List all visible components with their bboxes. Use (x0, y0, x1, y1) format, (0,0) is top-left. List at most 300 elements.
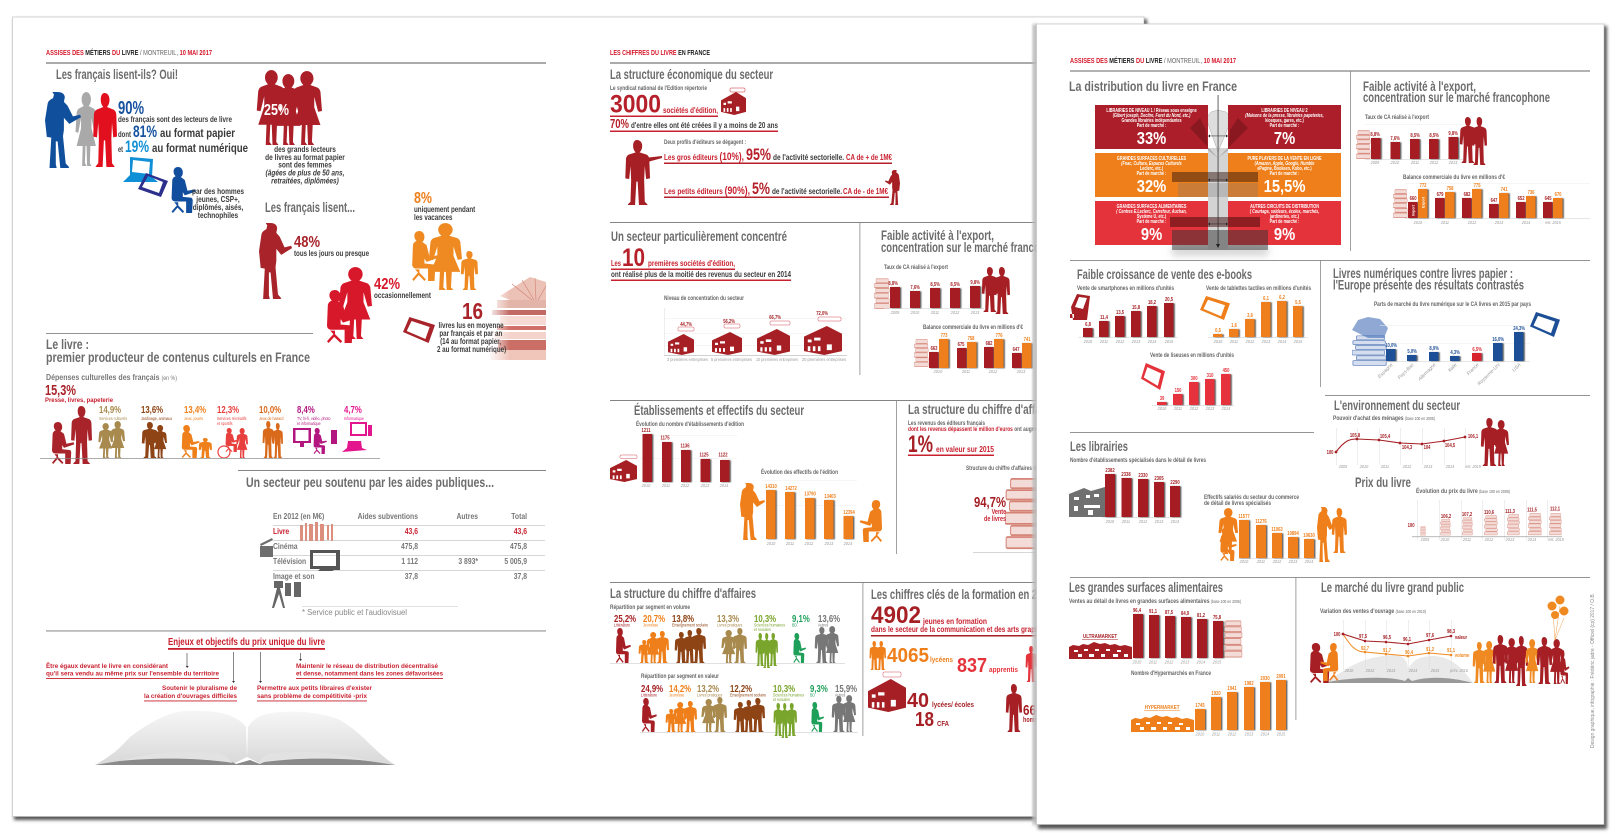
stat: 16 books per year: livres lus en moyenne (439, 321, 504, 330)
chart: market share by country: 10,0% (1385, 343, 1398, 348)
stat: 90 percent readers: et (118, 145, 123, 154)
chart: export share: 2010 (910, 310, 920, 315)
chart: établissements: 1175 (661, 435, 670, 441)
icon: crowd (1473, 635, 1569, 686)
chart: trade balance: est. 2015 (1545, 220, 1561, 225)
chart: export share: 2011 (1410, 160, 1420, 165)
chart: bookshop employees: 10630 (1303, 533, 1315, 538)
objective 2: la création d'ouvrages difficiles (144, 693, 237, 700)
chart: segments in volume: Livres pratiques (717, 622, 742, 628)
heading: L'environnement du secteur (1334, 397, 1460, 413)
stat: services récréatifs et sportifs: et sportifs (217, 421, 233, 426)
box: grandes surfaces alimentaires: 9% (1141, 225, 1163, 244)
chart: smartphones: 2015 (1164, 339, 1174, 344)
panel: un secteur peu soutenu (238, 470, 546, 617)
panel: faible activité à l'export, front page (1356, 78, 1590, 225)
panel: prix du livre (1355, 474, 1564, 542)
panel: e-books: Vente de smartphones en millions d'unités (1077, 285, 1174, 292)
chart: bookshop employees: 11063 (1271, 527, 1283, 532)
objective 1: Être égaux devant le livre en considérant (46, 661, 169, 670)
chart: smartphones (1070, 294, 1178, 344)
chart: book sales variation: 2010 (1344, 668, 1354, 673)
chart: effectifs: 2012 (804, 541, 814, 546)
credits: Design graphique, infographie : Frédéric jadre - Officiel (cp) 2017 / O.B. (1590, 593, 1596, 748)
icon and stat: 25 percent women (257, 70, 345, 186)
stat: 70 percent: d'entre elles ont été créées il y a moins de 20 ans (631, 121, 778, 130)
stat: gros éditeurs: Les gros éditeurs (10%), (664, 151, 744, 163)
chart: book sales variation: 92,7 (1361, 646, 1369, 651)
chart: hypermarkets: 1982 (1244, 681, 1254, 686)
stat: gros éditeurs: de l'activité sectorielle. (773, 153, 844, 162)
chart: tablets: 6,1 (1263, 296, 1269, 301)
panel: grandes surfaces alimentaires: Nombre d'Hypermarchés en France (1131, 670, 1211, 677)
header line right page: ASSISES DES MÉTIERS DU LIVRE / MONTREUIL, 10 MAI 2017 (1070, 56, 1236, 65)
chart: trade balance: 773 (941, 333, 948, 338)
chart: book sales variation: volume (1455, 653, 1470, 658)
heading: La structure du chiffre d'affaires (908, 401, 1058, 417)
chart: number of bookshops: 2290 (1170, 480, 1180, 485)
heading: Les chiffres clés de la formation en 2015 (871, 586, 1053, 602)
arrow: vertical axis (1208, 95, 1228, 248)
chart: hypermarkets: HYPERMARKET (1145, 705, 1180, 711)
chart: e-readers (1141, 363, 1234, 411)
chart: purchasing power line: 2011 (1380, 464, 1390, 469)
chart: bookshop employees: 2011 (1256, 559, 1266, 564)
chart: purchasing power line: 100 (1327, 450, 1334, 455)
chart: segments in value: et sociales (773, 697, 790, 702)
panel: établissements et effectifs: Évolution des effectifs de l'édition (761, 467, 838, 476)
chart: export share: 8,5% (1429, 133, 1440, 138)
chart: e-readers: 150 (1175, 388, 1182, 393)
chart: trade balance: 652 (1518, 196, 1525, 201)
chart: export share: 2009 (1370, 160, 1380, 165)
chart: segments in value: 14,2% (669, 683, 691, 694)
stat: 16 books per year: par français et par an (439, 329, 502, 338)
table: aides en 2012: Total (511, 511, 527, 521)
stat: 10 premières sociétés: ont réalisé plus de la moitié des revenus du secteur en 2014 (611, 270, 791, 279)
chart: segments in value: Enseignement scolaire (730, 692, 767, 698)
panel: un secteur particulièrement concentré: Niveau de concentration du secteur (664, 295, 744, 302)
box: librairies niveau 1: Part de marché : (1137, 122, 1167, 129)
chart: hypermarkets: 2010 (1195, 731, 1205, 737)
chart: smartphones: 20,5 (1165, 297, 1173, 302)
stat: 10 premières sociétés: Les (611, 258, 621, 268)
chart: book price: 2011 (1462, 537, 1472, 542)
panel: back spread sheet (12, 17, 1147, 820)
table: aides en 2012: Autres (457, 511, 478, 521)
chart: retail sales: 81,2 (1197, 613, 1205, 618)
stat: jardinage animaux (141, 404, 173, 458)
chart: trade balance: 647 (1491, 198, 1498, 203)
chart: smartphones: 2013 (1131, 339, 1141, 344)
box: librairies niveau 1 (1095, 105, 1208, 149)
chart: segments in volume (610, 613, 845, 668)
stat: 42 percent (327, 267, 431, 346)
chart: retail sales: 2010 (1132, 659, 1142, 665)
chart: bookshop employees: 2010 (1239, 559, 1249, 564)
chart: e-readers: 39 (1160, 396, 1165, 401)
stat: 3000 sociétés: 3000 (610, 90, 661, 118)
chart: smartphones: 11,4 (1100, 315, 1108, 320)
stat: informatique (342, 404, 372, 452)
chart: concentration buildings: 72,0% (816, 311, 829, 316)
box: grandes surfaces culturelles (1095, 153, 1208, 197)
stat: jeux jouets: 13,4% (184, 404, 206, 415)
chart: export share: 9,8% (970, 280, 981, 285)
chart: e-readers: 2012 (1189, 406, 1199, 411)
chart: tablets: 6,2 (1279, 295, 1285, 300)
box: autres circuits: ( Courtage, soldeurs, écoles, marchés, (1250, 208, 1319, 215)
panel: structure du chiffre d'affaires, 1 percent: dont les revenus dépassent le million d'euros ont augmenté de (908, 427, 1054, 433)
chart: market share by country: Allemagne (1416, 362, 1438, 383)
chart: number of bookshops: 2305 (1154, 476, 1164, 481)
icon: reading man small (885, 167, 900, 205)
chart: trade balance: 736 (1528, 190, 1535, 195)
chart: book price: 2012 (1484, 537, 1494, 542)
chart: segments in volume: BD (792, 622, 797, 628)
icon: three readers (45, 85, 117, 168)
chart: effectifs: 12394 (843, 510, 855, 515)
chart: bookshop employees: 11577 (1238, 514, 1250, 519)
heading: Prix du livre (1355, 474, 1411, 490)
panel: grandes surfaces alimentaires (1069, 577, 1590, 737)
box: grandes surfaces culturelles: GRANDES SURFACES CULTURELLES (1117, 155, 1186, 162)
chart: export share: 2009 (890, 310, 900, 315)
chart: trade balance: 2013 (1016, 369, 1026, 374)
stat: 40 lycées, 18 CFA: 40 (907, 690, 929, 712)
stat: jeux jouets: Jeux, jouets (184, 416, 203, 421)
panel: la structure économique du secteur: Le syndicat national de l'Edition répertorie (610, 85, 707, 92)
stat: 4902 jeunes: jeunes en formation (922, 617, 987, 626)
chart: tablets: 2011 (1229, 339, 1239, 344)
chart: établissements: 2014 (719, 483, 729, 488)
stat: 90 percent readers (118, 98, 248, 156)
heading: La distribution du livre en France (1069, 78, 1237, 94)
stat: 4065 lycéens: lycéens (930, 657, 953, 664)
chart: books pile 94,7 percent: de livres (984, 515, 1007, 523)
stat: 70 percent: 70% (610, 116, 629, 131)
overlay: book silhouettes (1170, 118, 1268, 250)
chart: export share (1356, 124, 1465, 165)
chart: segments in value: Littérature (641, 692, 658, 698)
box: pure players: ePagine, Bookeen, Kobo, etc.) (1257, 165, 1312, 172)
objective 3: Permettre aux petits libraires d'exister (257, 685, 372, 692)
box: librairies niveau 2: LIBRAIRIES DE NIVEAU 2 (1261, 107, 1308, 114)
chart: établissements: 1136 (681, 443, 690, 449)
chart: smartphones: 2010 (1083, 339, 1093, 344)
chart: purchasing power line: 2010 (1359, 464, 1369, 469)
chart: retail sales: 2012 (1164, 659, 1174, 665)
chart: purchasing power line: 105,4 (1380, 434, 1391, 439)
chart: établissements: 1211 (642, 428, 651, 433)
stat: 4902 jeunes (871, 602, 1056, 636)
panel: structure du chiffre d'affaires par segment (610, 582, 1037, 738)
chart: export share: 9,8% (1448, 131, 1459, 136)
chart: établissements: 1125 (700, 452, 709, 458)
chart: segments in value: 9,3% (810, 683, 828, 694)
chart: concentration buildings (664, 308, 847, 362)
icon: handshake (982, 267, 1010, 314)
chart: retail sales: 2013 (1180, 659, 1190, 665)
table: aides en 2012: 43,6 (514, 526, 527, 536)
chart: effectifs: 14272 (785, 486, 797, 491)
chart: purchasing power line (1327, 428, 1481, 469)
icon and stat: 25 percent women: (âgées de plus de 50 ans, (266, 168, 344, 178)
panel: faible activité à l'export, back page (874, 227, 1068, 374)
objective 3: sans problème de compétitivité -prix (257, 693, 367, 700)
icon and stat: 25 percent women: de livres au format papier (265, 152, 345, 162)
chart: segments in volume: Autres (818, 622, 828, 628)
objective 4: Maintenir le réseau de distribution décentralisé (296, 663, 438, 670)
chart: trade balance: Import (1412, 204, 1416, 216)
chart: retail sales: ULTRAMARKET (1083, 634, 1118, 640)
chart: segments in value: 12,2% (730, 683, 752, 694)
chart: effectifs: 2013 (824, 541, 834, 546)
stat: tv hi-fi vidéo photo: TV, hi-fi, vidéo, photo (297, 416, 331, 421)
chart: retail sales: 2014 (1196, 659, 1206, 665)
panel: la structure économique du secteur: Deux profils d'éditeurs se dégagent : (664, 139, 746, 146)
chart: trade balance (914, 333, 1048, 374)
chart: export share: 2013 (970, 310, 980, 315)
chart: market share by country: 5,0% (1407, 349, 1418, 354)
chart: book sales variation: 96,5 (1383, 635, 1391, 640)
icon: laptop, tablet and seated man: technophiles (198, 210, 238, 220)
icon: handshake (1460, 117, 1487, 165)
chart: book sales variation: 2015 (1430, 668, 1440, 673)
subtitle: dépenses culturelles: Dépenses culturelles des français (en %) (46, 373, 177, 382)
heading: enjeux: Enjeux et objectifs du prix unique du livre (168, 637, 325, 648)
panel: structure du chiffre d'affaires, 1 percent: Structure du chiffre d'affaires des éditeurs (966, 465, 1061, 472)
chart: retail sales: 2011 (1148, 659, 1158, 665)
stat: 4065 lycéens: 4065 (887, 645, 929, 667)
box: autres circuits: AUTRES CIRCUITS DE DISTRIBUTION (1250, 203, 1319, 210)
stat: 66 percent hommes: hommes (1023, 716, 1046, 724)
table: aides en 2012: 3 893* (458, 556, 478, 566)
panel: front sheet (1032, 24, 1607, 829)
icon: family (1481, 418, 1509, 466)
chart: books pile 94,7 percent: 94,7% (974, 494, 1006, 511)
heading: Un secteur particulièrement concentré (611, 228, 787, 244)
chart: hypermarkets: 1920 (1211, 691, 1221, 696)
box: grandes surfaces alimentaires: Part de marché : (1137, 218, 1167, 225)
chart: segments in value: BD (810, 692, 815, 698)
chart: bookshop employees: 10894 (1287, 531, 1299, 536)
chart: trade balance: 2010 (1413, 220, 1423, 225)
chart: tablets: 2014 (1277, 339, 1287, 344)
box: grandes surfaces culturelles: Part de marché : (1137, 170, 1167, 177)
chart: book price: 2010 (1440, 537, 1450, 542)
chart: export share: 2012 (950, 310, 960, 315)
box: autres circuits: Part de marché : (1270, 218, 1300, 225)
chart: book price: 107,2 (1462, 512, 1473, 517)
stat: tv hi-fi vidéo photo (293, 404, 337, 455)
chart: export share: 2012 (1429, 160, 1439, 165)
chart: purchasing power line: 104,5 (1445, 443, 1456, 448)
objective 4 (296, 663, 443, 679)
heading: La structure économique du secteur (610, 66, 773, 82)
chart: hypermarkets: 2014 (1260, 731, 1270, 737)
chart: concentration buildings: 5 premières entreprises (711, 357, 753, 362)
heading: Le marché du livre grand public (1321, 579, 1464, 595)
heading: La structure du chiffre d'affaires (610, 585, 756, 601)
panel: faible activité à l'export, front page: Balance commerciale du livre en millions d'€ (1403, 174, 1505, 181)
box: pure players: (Amazon, Apple, Google, Humble (1255, 160, 1315, 167)
stat: presse livres papeterie: 15,3% (45, 382, 76, 399)
chart: hypermarkets: 2012 (1227, 731, 1237, 737)
stat: petits éditeurs: Les petits éditeurs (90%), (664, 185, 750, 197)
icon: camera tripod (272, 581, 301, 608)
chart: segments in volume: 13,3% (717, 613, 739, 624)
chart: export share: 2010 (1390, 160, 1400, 165)
chart: book price (1408, 500, 1564, 542)
chart: market share by country: Pays-Bas (1397, 362, 1416, 381)
panel: e-books: Vente de liseuses en millions d'unités (1150, 352, 1234, 359)
chart: market share by country: 8,0% (1429, 346, 1440, 351)
chart: market share by country: 16,0% (1492, 337, 1505, 342)
chart: smartphones: 15,8 (1132, 305, 1140, 310)
chart: trade balance: 647 (1013, 347, 1020, 352)
panel: environnement du secteur: Pouvoir d'achat des ménages (base 100 en 2005) (1333, 415, 1435, 422)
panel: faible activité à l'export, back page: Taux de CA réalisé à l'export (884, 264, 949, 271)
table: aides en 2012: Cinéma (273, 541, 298, 551)
panel: faible activité à l'export, front page: Taux de CA réalisé à l'export (1365, 114, 1430, 121)
stat: 8 percent: 8% (414, 190, 432, 207)
chart: hypermarkets: 1745 (1195, 703, 1205, 708)
icon and stat: 25 percent women: 25% (264, 102, 289, 119)
chart: number of bookshops: 2338 (1121, 472, 1131, 477)
chart: book sales variation: 91,7 (1383, 648, 1391, 653)
stat: services culturels: Services culturels (99, 416, 127, 421)
chart: book sales variation: 91,1 (1447, 648, 1455, 653)
heading: les français lisent: Les français lisent... (265, 199, 355, 215)
chart: segments in volume: Sciences humaines (754, 622, 785, 628)
chart: book sales variation: 2014 (1408, 668, 1418, 673)
chart: book price: 111,5 (1527, 507, 1537, 513)
chart: book sales variation: 91,2 (1426, 647, 1434, 652)
box: autres circuits: 9% (1274, 225, 1296, 244)
icon: seated pair (1310, 643, 1338, 685)
stat: 10 premières sociétés (611, 244, 791, 281)
icon and stat: 25 percent women: des grands lecteurs (274, 144, 336, 154)
chart: purchasing power line: est. 2015 (1465, 464, 1481, 469)
icon: laptop, tablet and seated man (123, 157, 244, 220)
chart: books pile 94,7 percent: Vente (992, 508, 1007, 516)
box: pure players: Part de marché : (1270, 170, 1300, 177)
chart: export share: 7,6% (910, 285, 921, 290)
stat: 16 books per year: 2 au format numérique) (437, 345, 507, 354)
objective 4: et dense, notamment dans les zones défavorisées (296, 670, 443, 678)
chart: établissements (610, 428, 737, 488)
chart: segments in value: Sciences humaines (773, 692, 804, 698)
panel: les librairies: de détail de livres spécialisés (1204, 500, 1271, 507)
chart: purchasing power line: 104,3 (1402, 445, 1413, 450)
chart: trade balance: 660 (1410, 196, 1417, 201)
stat: 1 percent (908, 431, 994, 458)
stat: services culturels: 14,9% (99, 404, 121, 415)
panel: marché du livre grand public (1310, 579, 1569, 686)
chart: book sales variation: 97,6 (1426, 633, 1434, 638)
chart: retail sales: 91,1 (1149, 609, 1157, 614)
chart: books pile 94,7 percent (973, 479, 1048, 553)
chart: concentration buildings: 3 premières entreprises (667, 357, 709, 362)
chart: concentration buildings: 10 premières entreprises (756, 357, 799, 362)
stat: 90 percent readers: dont (118, 130, 131, 139)
icon: laptop, tablet and seated man: jeunes, CSP+, (195, 194, 240, 204)
chart: number of bookshops: 2010 (1105, 519, 1115, 524)
box: grandes surfaces culturelles: 32% (1137, 177, 1167, 196)
chart: number of bookshops: 2382 (1105, 468, 1115, 473)
table: aides en 2012: Image et son (273, 571, 315, 581)
stat: 4065 lycéens (870, 641, 953, 670)
chart: export share (874, 279, 984, 315)
stat: tv hi-fi vidéo photo: 8,4% (297, 404, 315, 415)
chart: hypermarkets: 2011 (1211, 731, 1221, 737)
panel: les librairies: Effectifs salariés du secteur du commerce (1204, 494, 1299, 501)
panel: le livre, dépenses culturelles (40, 333, 380, 466)
chart: effectifs (740, 478, 882, 546)
chart: purchasing power line: 105,8 (1350, 433, 1361, 438)
icon: faded book pile (490, 277, 546, 362)
chart: segments in value: 10,3% (773, 683, 795, 694)
icon: book stack background (1172, 110, 1268, 255)
chart: export share: 2011 (930, 310, 940, 315)
stat: 1 percent: 1% (908, 431, 933, 458)
chart: book price: 111,3 (1505, 509, 1515, 514)
chart: trade balance: 776 (996, 333, 1003, 338)
heading: Faible activité à l'export, (1363, 78, 1476, 94)
heading: Les grandes surfaces alimentaires (1069, 579, 1223, 595)
stat: 8 percent (412, 190, 478, 290)
heading: le livre premier producteur: Le livre : (46, 336, 89, 352)
chart: book price: est. 2015 (1548, 537, 1564, 542)
stat: 40 lycées, 18 CFA: CFA (937, 719, 949, 728)
chart: e-readers: 2014 (1221, 406, 1231, 411)
box: librairies niveau 2: 7% (1274, 129, 1296, 148)
chart: export share: 8,5% (930, 282, 941, 287)
chart: book sales variation: 2013 (1386, 668, 1396, 673)
chart: segments in volume: 25,2% (614, 613, 636, 624)
chart: number of bookshops: 2012 (1138, 519, 1148, 524)
panel: livres numériques contre livres papier (1333, 265, 1560, 387)
chart: effectifs: 2011 (785, 541, 795, 546)
chart: number of bookshops: 2013 (1154, 519, 1164, 524)
chart: retail sales: 75,8 (1213, 615, 1221, 620)
chart: effectifs: 2010 (766, 541, 776, 546)
chart: segments in volume: et sociales (754, 627, 771, 632)
chart: segments in value: Jeunesse (669, 692, 685, 698)
chart: hypermarkets: 2030 (1260, 676, 1270, 681)
table: aides en 2012: 5 005,9 (504, 556, 527, 566)
arrows (186, 652, 302, 683)
chart: trade balance: 645 (1545, 196, 1552, 201)
stat: services récréatifs et sportifs: 12,3% (217, 404, 239, 415)
stat: gros éditeurs: CA de + de 1M€ (846, 153, 892, 162)
chart: trade balance: 682 (1464, 192, 1471, 197)
chart: purchasing power line: 104 (1424, 445, 1431, 450)
chart: segments in volume: Enseignement scolaire (672, 622, 709, 628)
icon and stat: 25 percent women: sont des femmes (278, 160, 332, 170)
chart: tablets: 3,6 (1247, 313, 1253, 318)
chart: market share by country (1352, 312, 1560, 387)
chart: hypermarkets: 1941 (1227, 686, 1237, 691)
icon: open book base (1323, 655, 1473, 683)
chart: book sales variation: 90,4 (1405, 650, 1413, 655)
chart: hypermarkets: 2091 (1276, 674, 1286, 679)
chart: tablets: 0,5 (1215, 328, 1221, 333)
stat: 40 lycées, 18 CFA: 18 (915, 709, 934, 731)
stat: 90 percent readers: 81% (133, 122, 157, 141)
heading: l'Europe présente des résultats contrastés (1333, 276, 1524, 292)
